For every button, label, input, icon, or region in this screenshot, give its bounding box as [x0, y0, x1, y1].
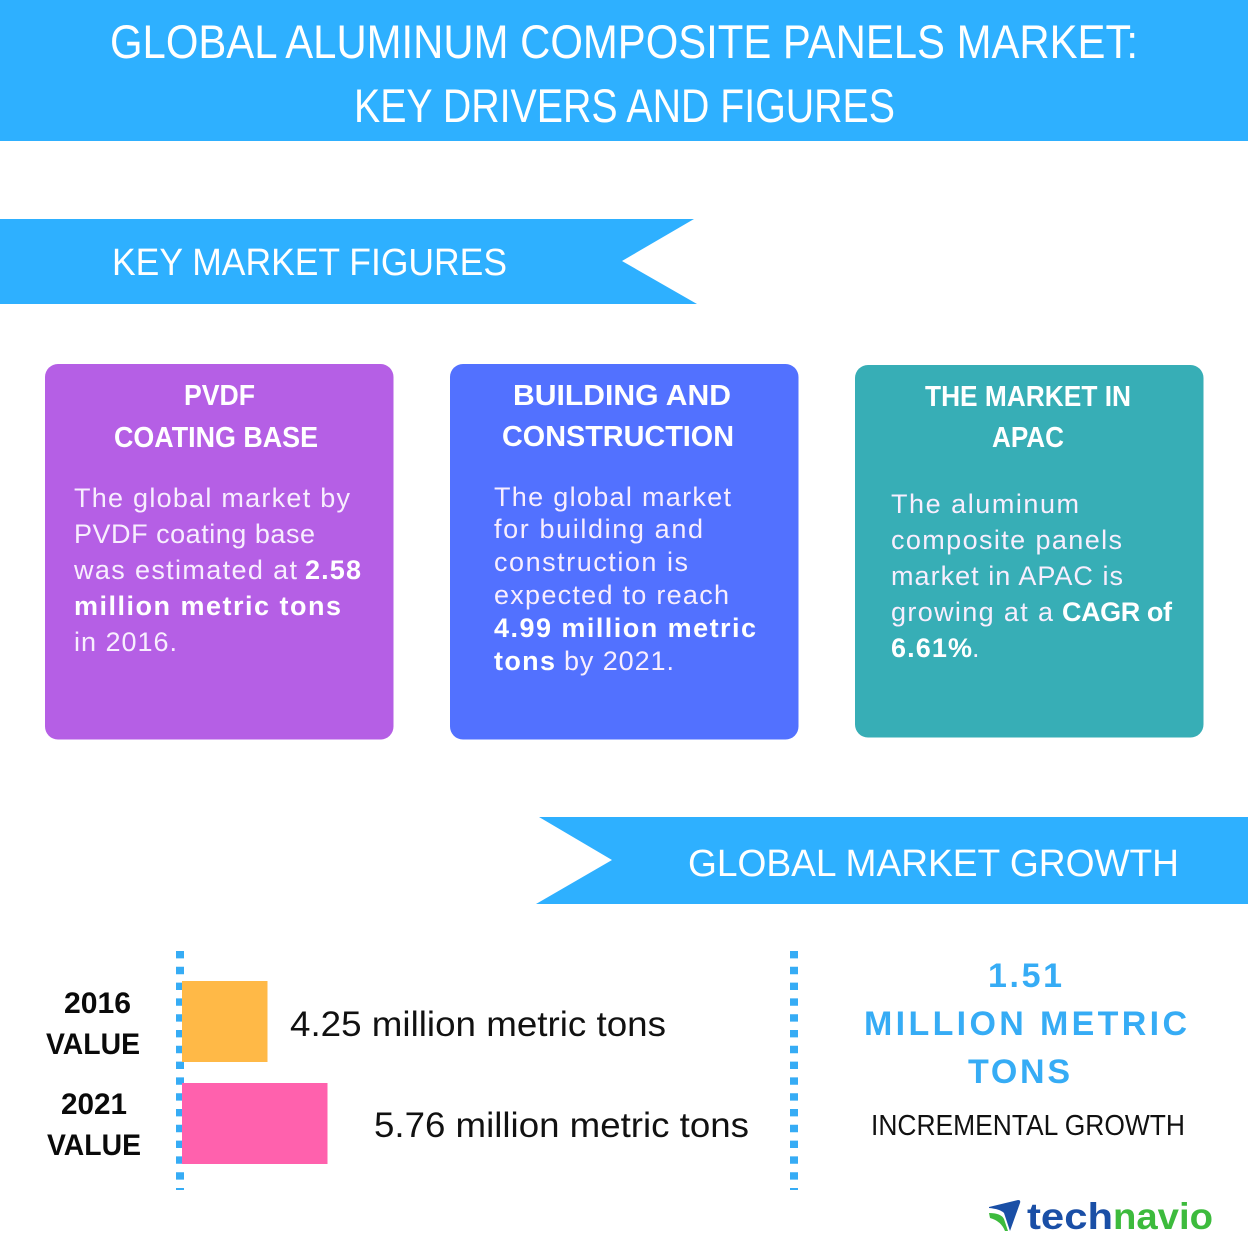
text: building and construction figure	[494, 482, 756, 676]
ribbon: key market figures	[0, 219, 697, 304]
text: APAC growth figure: The aluminum	[891, 489, 1079, 519]
heading: the market in APAC: APAC	[992, 422, 1064, 454]
text: APAC growth figure	[891, 489, 1173, 663]
text: PVDF market figure: 2.58	[305, 555, 361, 585]
title	[110, 15, 1138, 132]
text: APAC growth figure: market in APAC is	[891, 561, 1123, 591]
callout: incremental growth: 1.51	[988, 957, 1062, 995]
text: APAC growth figure: .	[972, 633, 980, 663]
panel: the market in APAC	[855, 365, 1204, 738]
text: PVDF market figure: PVDF coating base	[74, 519, 315, 549]
ribbon: key market figures: KEY MARKET FIGURES	[112, 242, 507, 284]
text: PVDF market figure: in 2016.	[74, 627, 177, 657]
bar chart: market value 2016 vs 2021	[46, 951, 749, 1190]
label: 2016 value: 2016	[64, 987, 131, 1020]
callout: incremental growth	[864, 957, 1187, 1142]
heading: building and construction	[502, 380, 734, 453]
text: building and construction figure: construction is	[494, 547, 688, 577]
callout: incremental growth: MILLION METRIC	[864, 1005, 1187, 1043]
callout: incremental growth: INCREMENTAL GROWTH	[871, 1110, 1185, 1142]
text: building and construction figure: for building and	[494, 514, 703, 544]
label: 2016 value: VALUE	[46, 1028, 140, 1061]
heading: building and construction: CONSTRUCTION	[502, 421, 734, 453]
bar: 2021	[182, 1083, 328, 1164]
title: GLOBAL ALUMINUM COMPOSITE PANELS MARKET:	[110, 15, 1138, 68]
ribbon: global market growth: GLOBAL MARKET GROWTH	[688, 843, 1179, 885]
panel: building and construction	[450, 364, 798, 740]
text: APAC growth figure: CAGR of	[1062, 597, 1173, 627]
panel: PVDF coating base	[45, 364, 394, 740]
heading: the market in APAC	[925, 381, 1131, 454]
text: APAC growth figure: 6.61%	[891, 633, 972, 663]
text: building and construction figure: expected to reach	[494, 580, 729, 610]
text: PVDF market figure: The global market by	[74, 483, 350, 513]
label: 2016 value	[46, 987, 140, 1061]
text: building and construction figure: by 2021.	[564, 646, 674, 676]
heading: PVDF coating base	[114, 380, 318, 454]
text: PVDF market figure: million metric tons	[74, 591, 341, 621]
heading: the market in APAC: THE MARKET IN	[925, 381, 1131, 413]
bar: 2016	[182, 981, 268, 1062]
text: building and construction figure: The global market	[494, 482, 731, 512]
title: KEY DRIVERS AND FIGURES	[354, 79, 895, 132]
text: building and construction figure: tons	[494, 646, 555, 676]
heading: building and construction: BUILDING AND	[513, 380, 731, 412]
text: APAC growth figure: growing at a	[891, 597, 1054, 627]
text: PVDF market figure	[73, 483, 361, 657]
value: 2016: 4.25 million metric tons	[290, 1005, 666, 1044]
heading: PVDF coating base: COATING BASE	[114, 422, 318, 454]
label: 2021 value	[47, 1088, 141, 1162]
logo: technavio: tech	[1027, 1196, 1113, 1237]
ribbon: global market growth	[536, 817, 1248, 904]
callout: incremental growth: TONS	[968, 1053, 1070, 1091]
header banner	[0, 0, 1248, 141]
text: APAC growth figure: composite panels	[891, 525, 1122, 555]
icon: navigation arrow	[989, 1200, 1020, 1231]
heading: PVDF coating base: PVDF	[184, 380, 255, 412]
value: 2021: 5.76 million metric tons	[374, 1106, 749, 1145]
label: 2021 value: 2021	[61, 1088, 127, 1121]
logo: technavio: navio	[1113, 1196, 1213, 1237]
label: 2021 value: VALUE	[47, 1129, 141, 1162]
logo: technavio	[989, 1196, 1213, 1237]
text: building and construction figure: 4.99 million metric	[494, 613, 756, 643]
text: PVDF market figure: was estimated at	[73, 555, 297, 585]
